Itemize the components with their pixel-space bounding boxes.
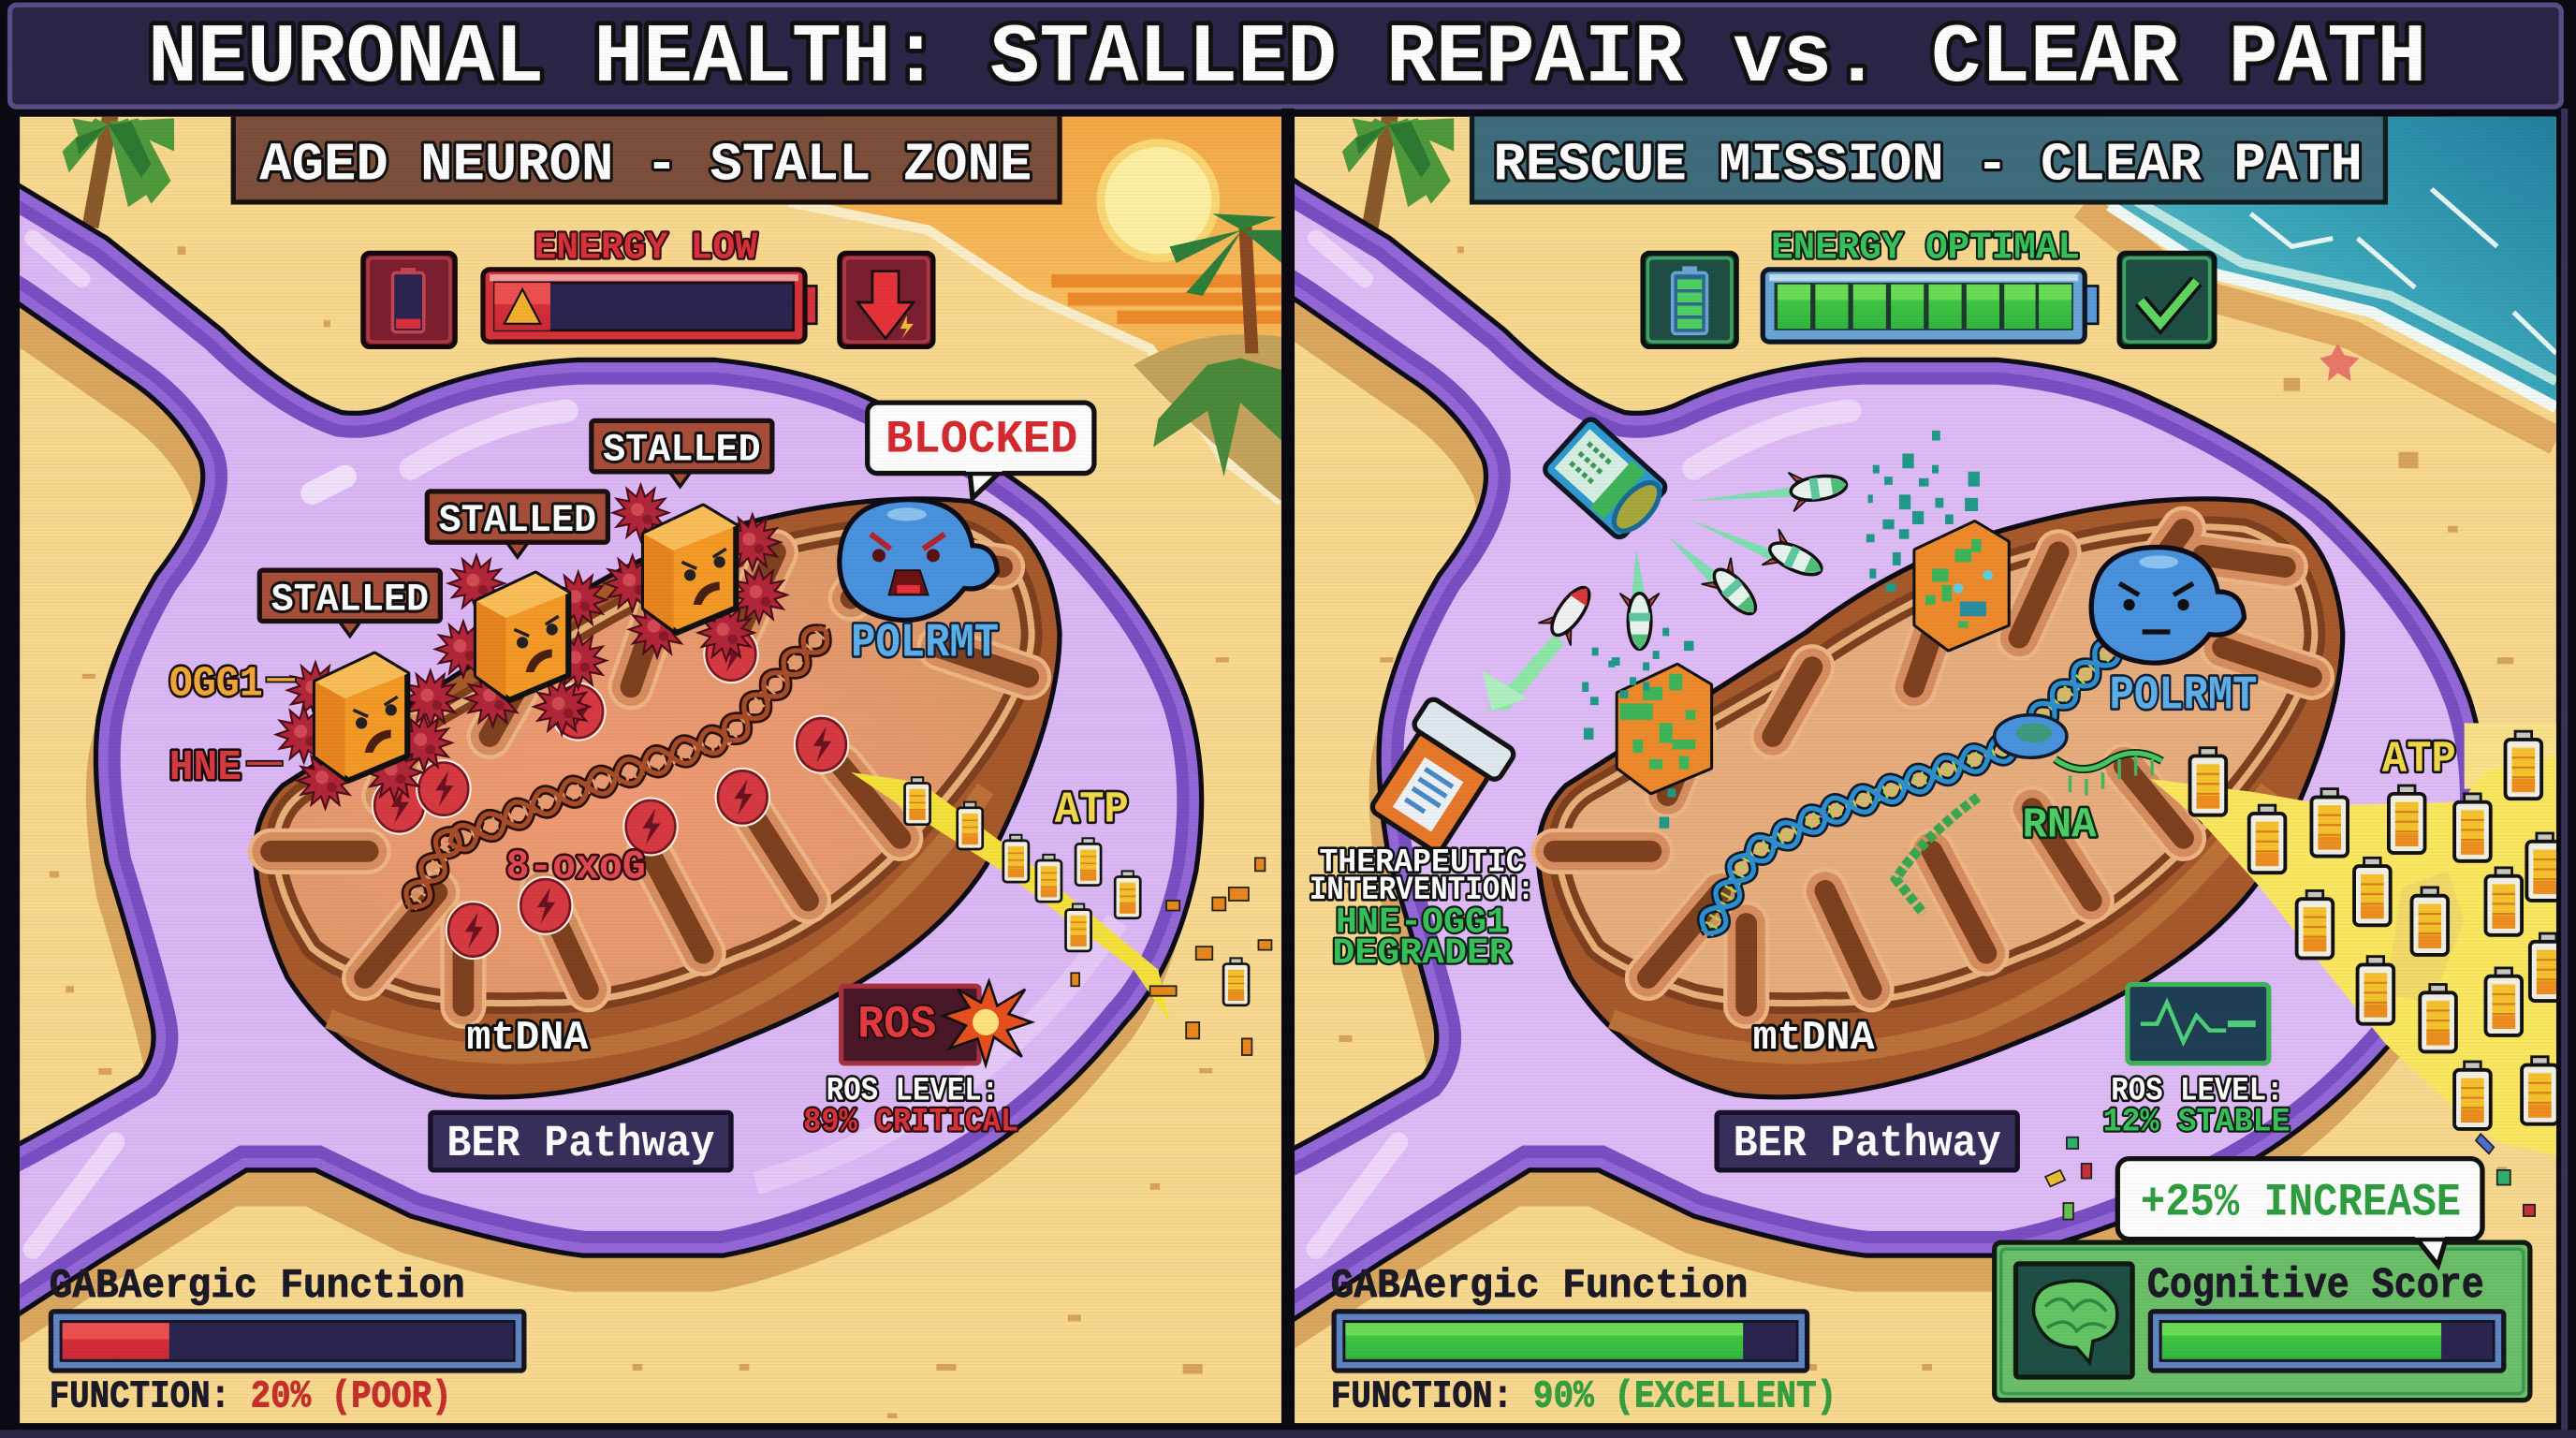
ocean	[2083, 117, 2556, 440]
starfish	[2320, 344, 2359, 381]
stalled tag 2: STALLED	[439, 498, 596, 543]
mitochondrion	[255, 499, 1060, 1097]
label: ATP: ATP	[2382, 735, 2456, 785]
stalled tag 1	[259, 570, 440, 636]
icon: warning triangle	[505, 289, 540, 324]
ATP leak beam	[851, 772, 1170, 1022]
debris	[1071, 858, 1271, 1055]
ROS level readout: ROS LEVEL:	[827, 1072, 999, 1109]
panel: rescue mission clear path	[1240, 111, 2566, 1423]
therapeutic intervention label: DEGRADER	[1332, 933, 1513, 975]
neuron cell body	[1240, 148, 2484, 1384]
ROS level readout	[2103, 1072, 2291, 1141]
POLRMT angry blob	[840, 500, 997, 620]
panel: aged neuron stall zone	[0, 111, 1281, 1423]
GABAergic function bar	[1334, 1312, 1808, 1371]
label: POLRMT: POLRMT	[2110, 670, 2258, 724]
title: NEURONAL HEALTH: STALLED REPAIR vs. CLEAR PATH	[148, 10, 2426, 106]
sunset sky	[788, 117, 1281, 501]
mtDNA double helix	[1696, 635, 2126, 939]
label: RNA: RNA	[2023, 801, 2097, 850]
label: POLRMT: POLRMT	[851, 617, 999, 670]
sand specks	[1339, 246, 2513, 1371]
neuron cell body	[0, 148, 1202, 1384]
label: mtDNA: mtDNA	[466, 1015, 589, 1062]
OGG1 stalled blocks	[315, 506, 736, 781]
section header	[233, 111, 1060, 202]
blocked callout: BLOCKED	[886, 414, 1077, 466]
energy bar low	[483, 270, 816, 342]
mtDNA strand	[400, 622, 834, 914]
therapeutic intervention label: HNE-OGG1	[1336, 902, 1508, 943]
therapeutic intervention label: THERAPEUTIC	[1319, 844, 1525, 881]
stalled tag 2	[427, 492, 607, 557]
cognitive score panel	[1995, 1242, 2530, 1401]
section header: RESCUE MISSION - CLEAR PATH	[1493, 135, 2363, 196]
palm tree top left	[63, 117, 174, 228]
bottom frame strip	[0, 1430, 2576, 1438]
icon: energy falling arrow	[840, 253, 933, 346]
energy bar optimal	[1763, 270, 2098, 342]
8-oxoG lesions	[372, 624, 849, 960]
RNA strand	[1895, 753, 2162, 914]
pixel particles upper	[1866, 431, 1980, 592]
section header: AGED NEURON - STALL ZONE	[259, 135, 1032, 196]
energy optimal label: ENERGY OPTIMAL	[1771, 227, 2080, 271]
ROS level readout: ROS LEVEL:	[2111, 1072, 2284, 1109]
center divider	[1281, 109, 1295, 1431]
stalled tag 1: STALLED	[271, 577, 429, 622]
cognitive score bar	[2150, 1312, 2504, 1371]
mitochondrion	[1538, 499, 2343, 1097]
blocked callout	[868, 403, 1094, 498]
right frame strip	[2561, 109, 2568, 1438]
ATP batteries	[905, 777, 1249, 1005]
pill bottle	[1361, 697, 1516, 859]
therapeutic intervention label	[1310, 844, 1534, 975]
GABAergic function title: GABAergic Function	[1331, 1263, 1748, 1310]
sun	[1101, 143, 1216, 258]
palm trees and hill on the right	[1134, 213, 1281, 501]
icon: check mark	[2119, 253, 2215, 346]
icon: empty battery	[363, 253, 455, 346]
pixel particles lower	[1582, 628, 1694, 829]
BER pathway label: BER Pathway	[1734, 1120, 2001, 1169]
ROS level readout: 12% STABLE	[2103, 1104, 2291, 1141]
dissolving OGG1 block upper	[1915, 522, 2008, 649]
label: HNE	[169, 743, 283, 792]
missiles	[1482, 464, 1849, 710]
ROS level readout: 89% CRITICAL	[803, 1104, 1018, 1141]
section header	[1472, 111, 2385, 202]
+25% increase callout	[2117, 1159, 2482, 1266]
therapeutic vial	[1542, 417, 1672, 544]
BER pathway label: BER Pathway	[446, 1120, 714, 1169]
palm tree top	[1342, 117, 1454, 228]
function readout: FUNCTION: 90% (EXCELLENT)	[1331, 1376, 1837, 1419]
label: 8-oxoG: 8-oxoG	[506, 844, 646, 890]
dissolving OGG1 block lower	[1618, 666, 1710, 792]
+25% increase callout: +25% INCREASE	[2141, 1176, 2461, 1228]
stalled tag 3	[592, 420, 772, 487]
ATP batteries	[2190, 731, 2566, 1129]
ROS badge: ROS	[857, 999, 936, 1051]
HNE clusters	[276, 485, 787, 809]
ROS monitor	[2128, 985, 2269, 1064]
GABAergic function bar	[51, 1312, 524, 1371]
therapeutic intervention label: INTERVENTION:	[1310, 872, 1534, 909]
confetti particles	[2045, 1134, 2535, 1229]
ROS badge	[842, 981, 1032, 1065]
ROS level readout	[803, 1072, 1018, 1141]
function readout: FUNCTION: 20% (POOR)	[50, 1376, 452, 1419]
cognitive score title: Cognitive Score	[2147, 1261, 2484, 1310]
energy low label: ENERGY LOW	[534, 227, 758, 271]
brain icon tile	[2016, 1264, 2132, 1377]
stalled tag 3: STALLED	[603, 428, 761, 473]
POLRMT neutral blob	[2091, 548, 2244, 663]
label: HNE: HNE	[169, 743, 242, 792]
icon: full battery	[1643, 253, 1736, 346]
sand specks	[50, 246, 1229, 1418]
ATP yellow energy fan	[2150, 723, 2556, 1155]
label: mtDNA: mtDNA	[1753, 1015, 1875, 1062]
GABAergic function title: GABAergic Function	[50, 1263, 465, 1310]
label: OGG1: OGG1	[169, 660, 263, 709]
label: ATP: ATP	[1055, 786, 1129, 836]
title banner	[10, 5, 2561, 107]
